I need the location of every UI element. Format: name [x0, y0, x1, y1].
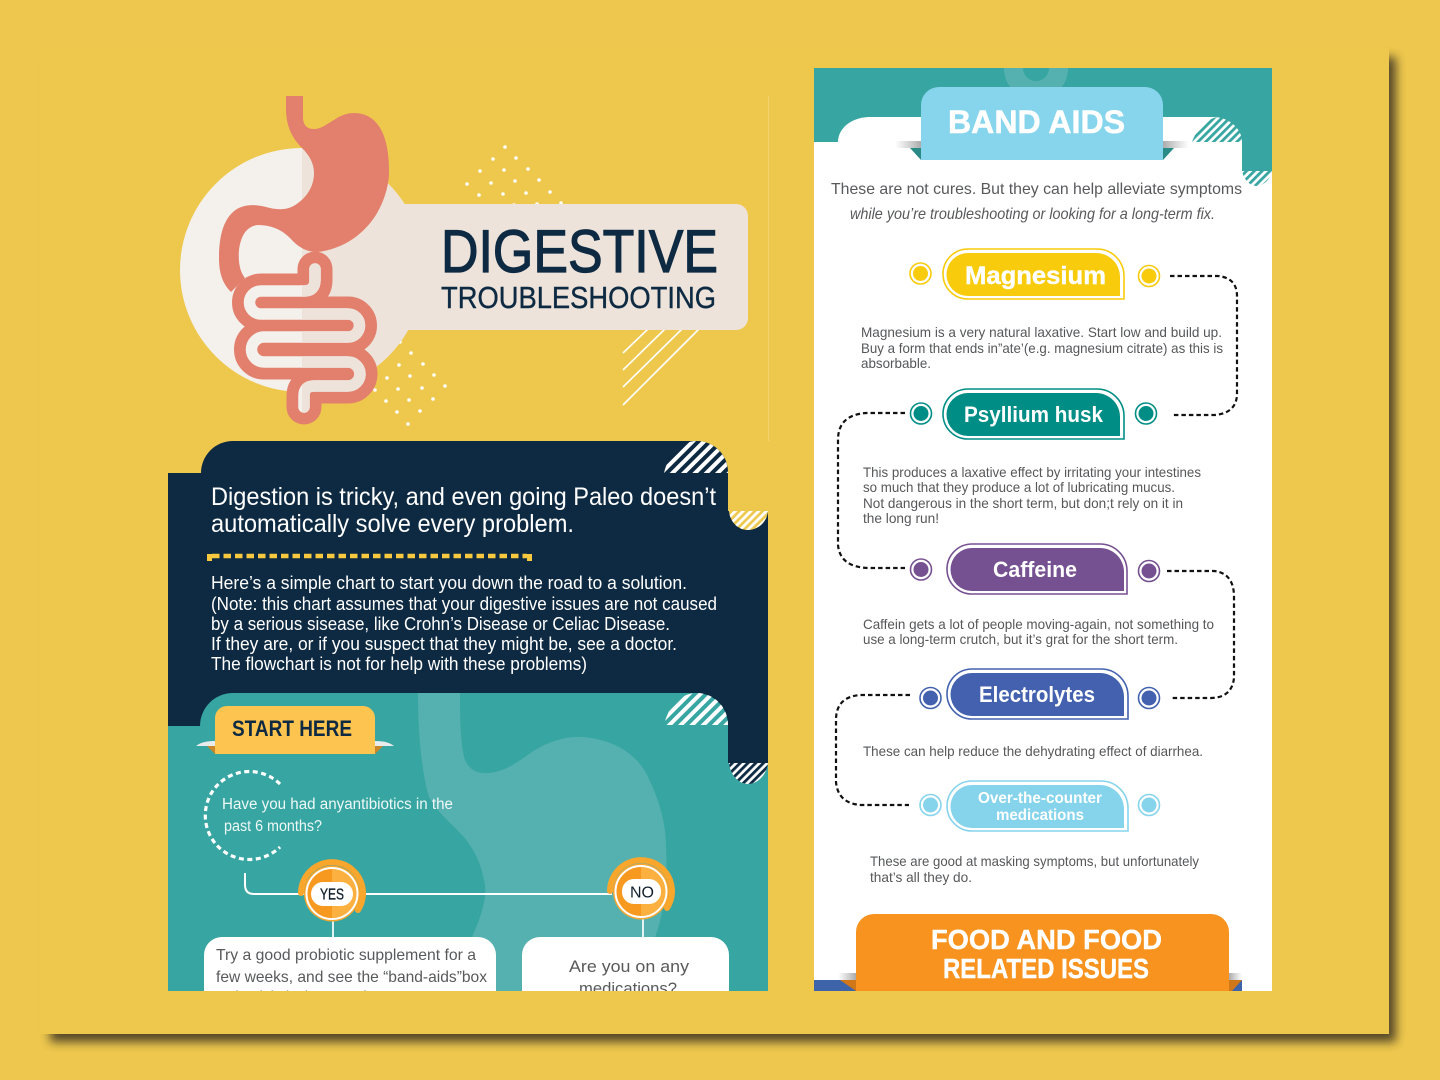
icon: intestines [250, 269, 360, 407]
hatch half disc [1242, 171, 1272, 186]
food section ribbon: RELATED ISSUES [943, 953, 1149, 984]
dashed connector: magnesium to psyllium [1170, 276, 1237, 415]
hatch half disc [729, 763, 768, 784]
panel: band aids [814, 46, 1272, 991]
band aids intro text: while you’re troubleshooting or looking for a long-term fix. [850, 206, 1215, 223]
caffeine description [863, 616, 1214, 647]
item: caffeine: Caffeine [993, 557, 1077, 582]
band aids intro text [831, 181, 1242, 223]
title [441, 218, 718, 315]
intro heading [211, 483, 716, 538]
food section ribbon: FOOD AND FOOD [931, 924, 1162, 955]
band aids ribbon [895, 87, 1189, 160]
item: over-the-counter medications: medications [996, 807, 1084, 824]
item: electrolytes [920, 669, 1160, 719]
item: over-the-counter medications: Over-the-counter [978, 790, 1102, 807]
psyllium description: This produces a laxative effect by irritating your intestines [863, 464, 1201, 480]
decorative dots lower [373, 340, 447, 426]
magnesium description: Magnesium is a very natural laxative. Start low and build up. [861, 324, 1222, 340]
yes badge [301, 862, 363, 922]
decorative diagonal lines [623, 329, 699, 405]
item: magnesium: Magnesium [965, 262, 1106, 290]
item: electrolytes: Electrolytes [979, 682, 1095, 707]
yes answer box: few weeks, and see the “band-aids”box [216, 969, 487, 986]
intro body text: by a serious sisease, like Crohn’s Disease or Celiac Disease. [211, 614, 670, 634]
intro heading: Digestion is tricky, and even going Paleo doesn’t [211, 483, 716, 511]
medications description: that’s all they do. [870, 869, 972, 885]
item: psyllium husk: Psyllium husk [964, 402, 1104, 427]
backdrop circle [180, 148, 424, 392]
caffeine description: Caffein gets a lot of people moving-again, not something to [863, 616, 1214, 632]
psyllium description: so much that they produce a lot of lubricating mucus. [863, 479, 1175, 495]
no answer box [522, 937, 729, 991]
no badge: NO [630, 884, 654, 902]
psyllium description: Not dangerous in the short term, but don;t rely on it in [863, 495, 1183, 511]
psyllium description: the long run! [863, 510, 939, 526]
band aids intro text: These are not cures. But they can help alleviate symptoms [831, 181, 1242, 198]
panel: introduction [168, 441, 768, 800]
dashed connector: caffeine to electrolytes [1167, 571, 1234, 698]
item: over-the-counter medications [920, 781, 1160, 831]
panel: flowchart [168, 693, 768, 1006]
food section ribbon [814, 914, 1242, 991]
intro body text: The flowchart is not for help with these problems) [211, 654, 587, 674]
icon: stomach [219, 96, 389, 292]
caffeine description: use a long-term crutch, but it’s grat for the short term. [863, 631, 1178, 647]
dashed connector: electrolytes to medications [836, 695, 910, 805]
flow connector lines [245, 873, 643, 938]
item: magnesium [910, 249, 1160, 299]
intro body text: If they are, or if you suspect that they might be, see a doctor. [211, 634, 677, 654]
medications description [870, 853, 1199, 885]
start here ribbon: START HERE [232, 716, 352, 741]
medications description: These are good at masking symptoms, but unfortunately [870, 853, 1199, 869]
hatch half disc [729, 511, 768, 530]
intro body text: Here’s a simple chart to start you down the road to a solution. [211, 573, 687, 593]
magnesium description: absorbable. [861, 355, 931, 371]
dashed question circle [205, 772, 280, 860]
question text: Have you had anyantibiotics in the [222, 796, 453, 813]
item: psyllium husk [910, 389, 1156, 439]
magnesium description [861, 324, 1223, 371]
decorative dots upper [465, 145, 563, 207]
start here ribbon [196, 706, 394, 754]
no answer box: Are you on any [569, 957, 690, 976]
electrolytes description: These can help reduce the dehydrating effect of diarrhea. [863, 743, 1203, 759]
title: DIGESTIVE [441, 218, 718, 285]
yes answer box: to the right in the meantime [216, 989, 386, 1006]
magnesium description: Buy a form that ends in”ate’(e.g. magnesium citrate) as this is [861, 340, 1223, 356]
no badge [610, 860, 672, 920]
psyllium description [863, 464, 1201, 526]
intro body text [211, 573, 717, 674]
intro body text: (Note: this chart assumes that your digestive issues are not caused [211, 594, 717, 614]
dashed divider [207, 554, 532, 561]
band aids ribbon: BAND AIDS [948, 104, 1125, 140]
question text [222, 796, 453, 835]
dashed connector: psyllium to caffeine [838, 413, 905, 568]
question text: past 6 months? [224, 818, 322, 835]
title plate [390, 204, 748, 330]
stomach watermark [418, 693, 666, 991]
header illustration: digestive system and title [180, 96, 748, 426]
hatch tab corner [664, 441, 728, 473]
item: caffeine [910, 544, 1160, 594]
hatch tab corner [664, 693, 728, 725]
ring watermark [1004, 68, 1068, 87]
title: TROUBLESHOOTING [441, 280, 716, 315]
hatch tab corner [1192, 117, 1242, 142]
no answer box: medications? [579, 979, 677, 998]
teal header band [814, 68, 1272, 171]
yes badge: YES [320, 886, 344, 904]
intro heading: automatically solve every problem. [211, 510, 574, 538]
yes answer box: Try a good probiotic supplement for a [216, 947, 476, 964]
yes answer box [204, 937, 496, 991]
